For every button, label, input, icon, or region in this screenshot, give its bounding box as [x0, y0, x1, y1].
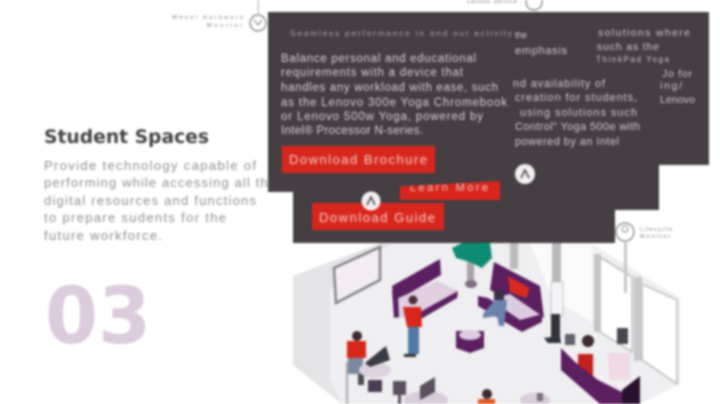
button: download guide: Download Guide — [319, 210, 435, 225]
panel main text: or Lenovo 500w Yoga, powered by — [281, 111, 483, 123]
panel centre text: creation for students, — [515, 92, 637, 104]
window wall — [510, 243, 677, 384]
panel main text: Balance personal and educational — [281, 53, 476, 65]
panel far-right text: Lenovo — [660, 94, 695, 106]
callout: right lifecycle label: Lifecycle — [640, 227, 672, 233]
panel far-right text: ing/ — [660, 80, 682, 92]
panel centre text: Control" Yoga 500e with — [515, 121, 640, 133]
panel far-right text: solutions where — [598, 27, 690, 39]
sofa left — [392, 259, 458, 319]
callout: top centre label — [467, 0, 542, 10]
callout: top left hardware label — [172, 0, 266, 31]
icon: close circle left — [362, 192, 380, 210]
panel centre text: the — [515, 30, 527, 40]
description text block: future workforce. — [44, 228, 162, 243]
ottoman — [456, 330, 484, 353]
description text block — [44, 158, 276, 243]
student seated — [483, 290, 507, 326]
whiteboard — [334, 247, 380, 303]
description text block: Provide technology capable of — [44, 158, 256, 173]
panel centre text: using solutions such — [520, 107, 637, 119]
panel main text: handles any workload with ease, such — [281, 82, 498, 94]
heading: Student Spaces: Student Spaces — [44, 126, 209, 148]
button: download guide — [312, 203, 444, 230]
panel notch covering button top — [268, 165, 500, 192]
panel far-right text: ThinkPad Yoga — [596, 55, 670, 64]
icon: close circle right — [515, 164, 535, 184]
panel far-right text: Jo for — [662, 68, 692, 80]
small panel caption: Show more — [310, 183, 352, 190]
illustration: isometric student space room — [293, 243, 680, 404]
button: learn more: Learn More — [410, 182, 488, 194]
panel main text: as the Lenovo 300e Yoga Chromebook — [281, 97, 507, 109]
standing lamp and bin — [544, 282, 563, 343]
callout: right lifecycle label: Monitor — [640, 234, 670, 240]
panel centre text: emphasis — [515, 45, 568, 57]
plant — [452, 243, 492, 288]
student front — [478, 389, 495, 404]
section number 03: 03 — [45, 272, 151, 362]
sofa right — [478, 262, 544, 332]
room floor — [293, 243, 680, 404]
description text block: digital resources and functions — [44, 193, 256, 208]
button: download brochure: Download Brochure — [289, 152, 427, 167]
callout: top left hardware label: Monitor — [207, 23, 242, 29]
reception desk and staff — [561, 328, 640, 404]
panel main text: requirements with a device that — [281, 67, 464, 79]
description text block: to prepare sudents for the — [44, 210, 226, 225]
panel main text — [281, 53, 507, 137]
panel far-right text: such as the — [597, 41, 659, 53]
table and chairs — [359, 346, 448, 404]
student at desk left — [346, 331, 366, 404]
panel main text: Intel® Processor N-series. — [281, 125, 423, 137]
button: learn more — [400, 180, 500, 200]
button: download brochure — [282, 146, 435, 173]
panel centre text: powered by an Intel — [515, 136, 619, 148]
callout: right lifecycle label — [616, 223, 672, 291]
panel centre text — [513, 30, 640, 148]
panel header line: Seamless performance in and out activity — [290, 28, 513, 38]
panel centre text: nd availability of — [513, 78, 606, 90]
student standing — [403, 296, 422, 357]
description text block: performing while accessing all the — [44, 175, 276, 190]
side chair — [520, 393, 550, 404]
overlapping dark tooltip panel — [268, 12, 709, 243]
panel far-right text — [596, 27, 695, 106]
callout: top left hardware label: Wheel Hardware — [172, 15, 243, 21]
